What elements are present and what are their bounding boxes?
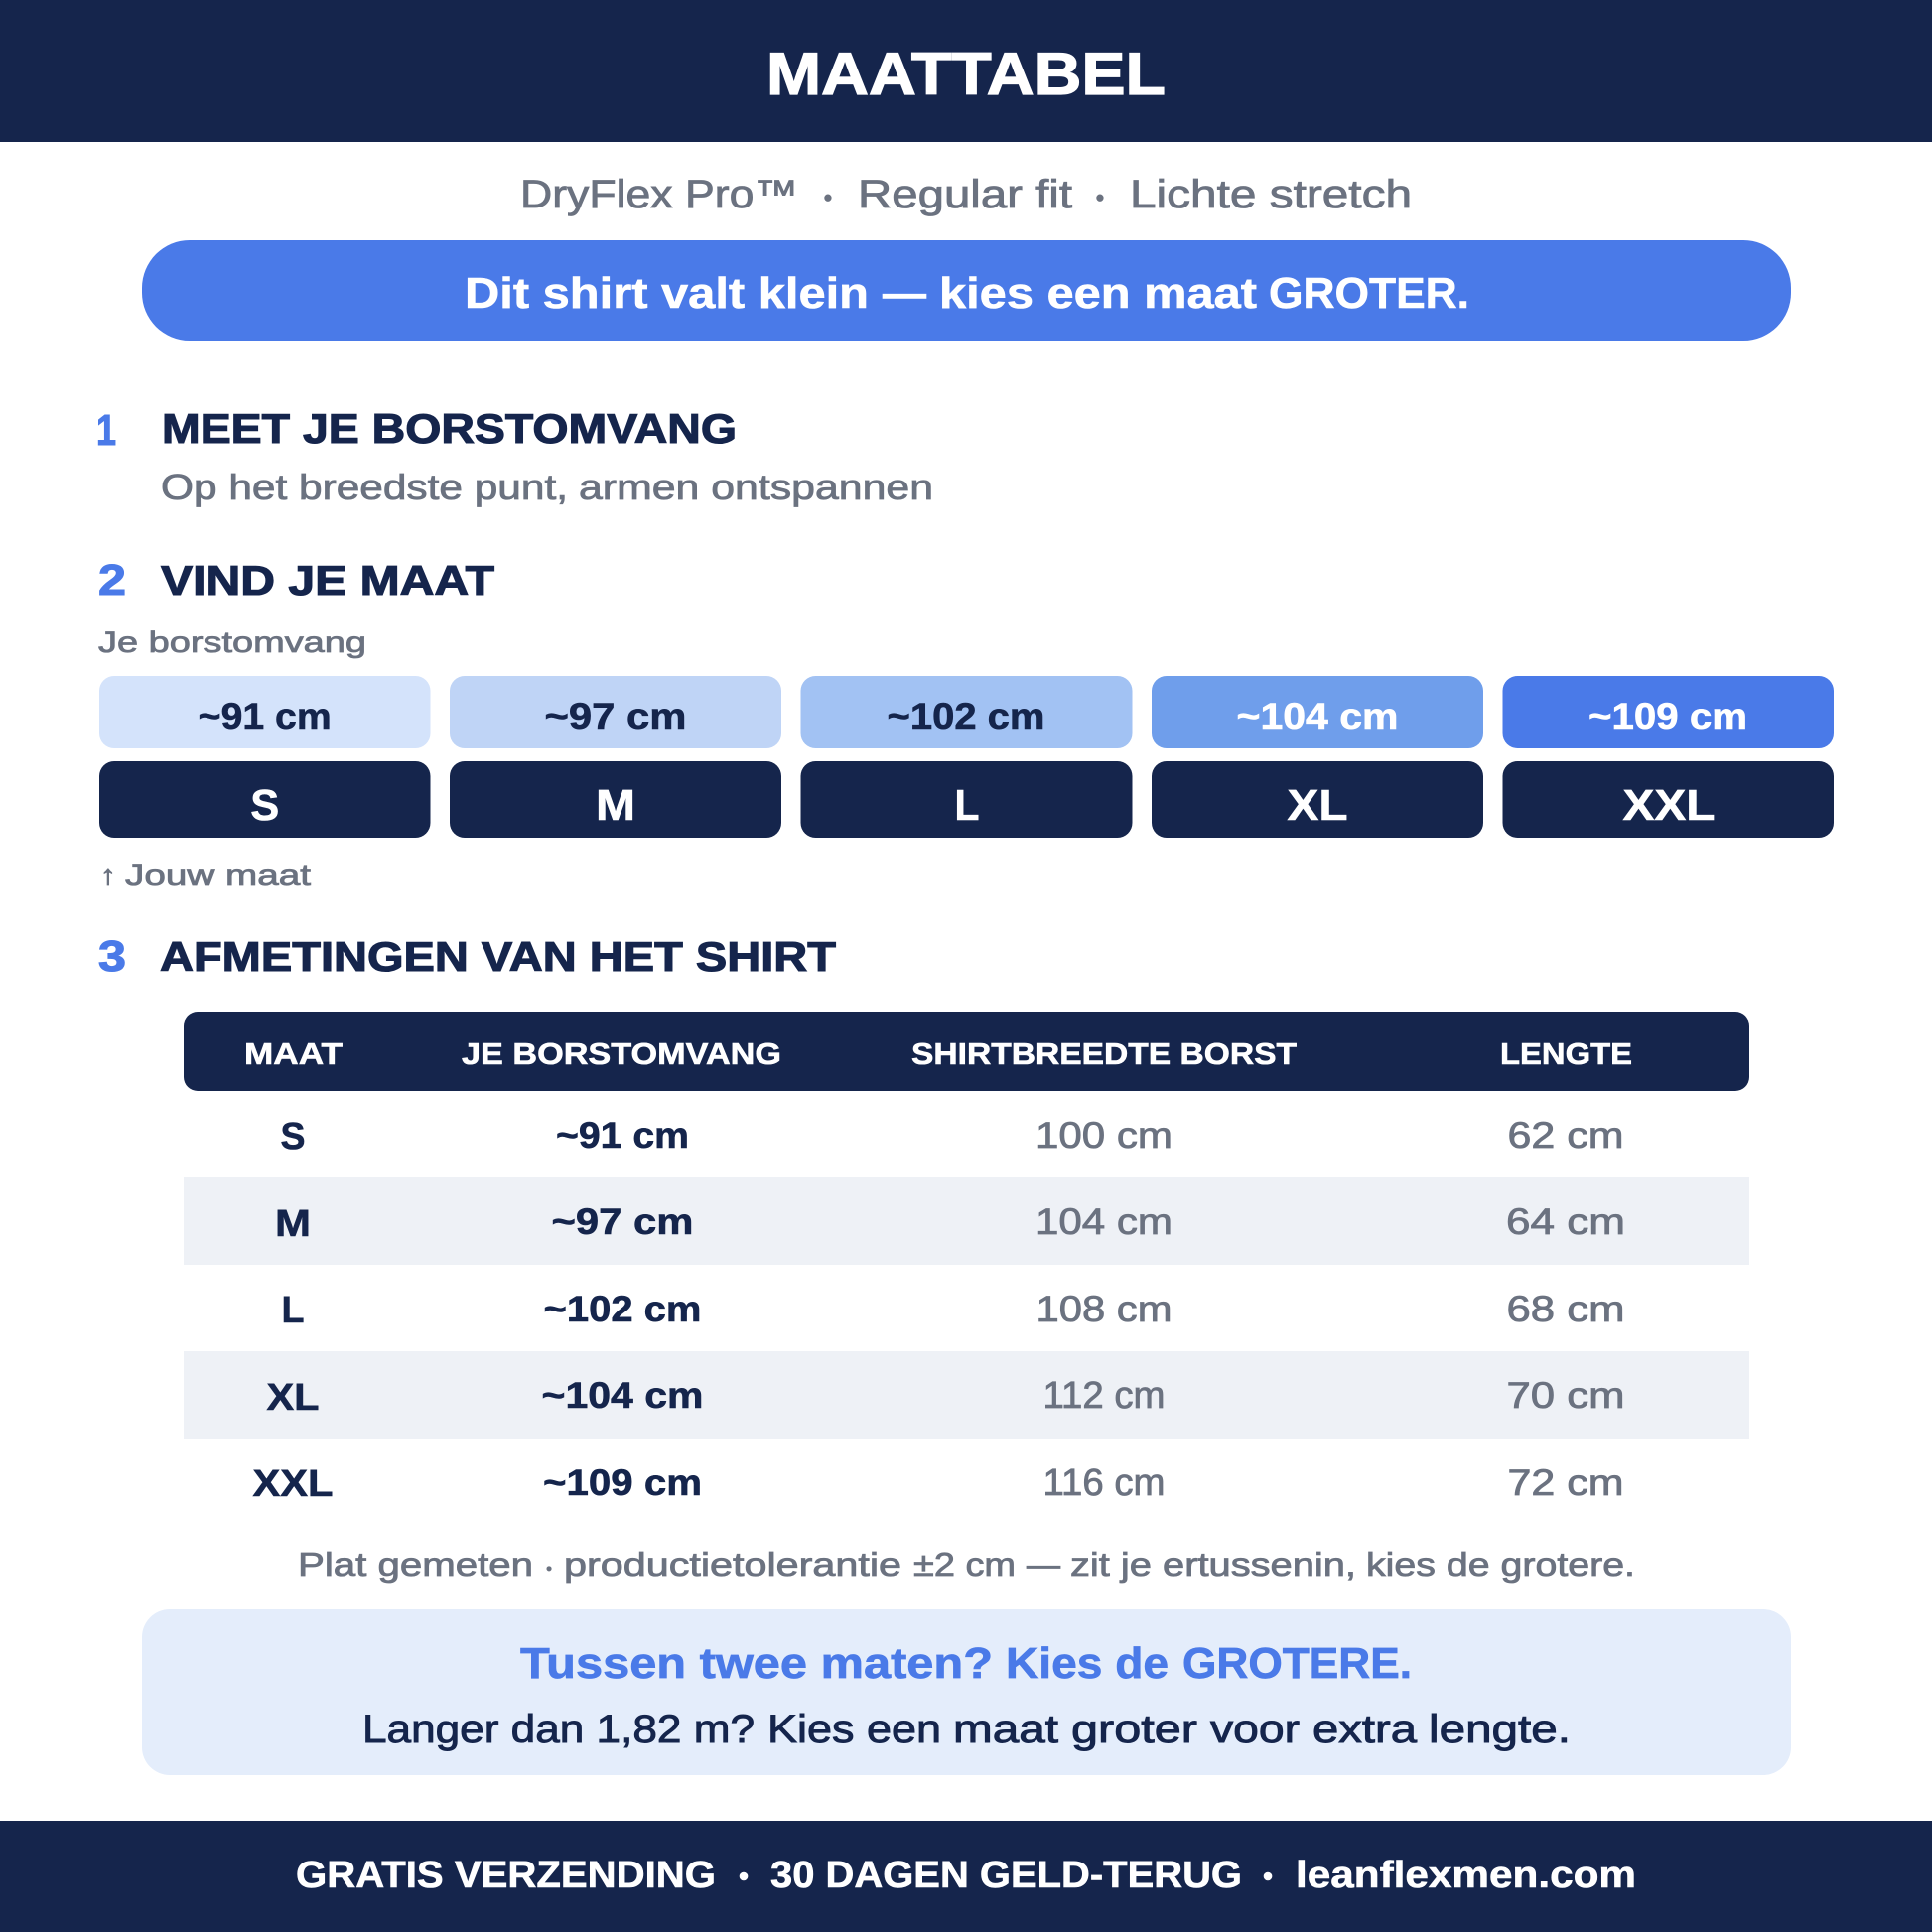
footer band: leanflexmen.com xyxy=(1296,1855,1636,1896)
callout panel xyxy=(142,1609,1791,1775)
callout body: groter xyxy=(1071,1708,1197,1751)
row L: 108 cm xyxy=(1036,1289,1172,1329)
your size note xyxy=(100,859,312,892)
callout headline: Tussen twee maten? xyxy=(520,1639,993,1688)
section 3 heading: AFMETINGEN VAN HET SHIRT xyxy=(160,933,836,980)
row XXL: ~109 cm xyxy=(543,1462,702,1503)
warning pill: Dit shirt valt klein xyxy=(465,269,869,318)
chip M: ~97 cm xyxy=(544,696,687,737)
footer band: GRATIS VERZENDING xyxy=(296,1855,716,1896)
row XL: ~104 cm xyxy=(542,1375,703,1416)
chip L xyxy=(800,676,1132,838)
row L xyxy=(282,1289,1624,1331)
callout body: Langer dan 1,82 m? xyxy=(362,1708,755,1751)
table footnote: — xyxy=(1027,1546,1060,1583)
row XL: XL xyxy=(266,1377,320,1419)
row L: ~102 cm xyxy=(544,1289,701,1329)
table header xyxy=(184,1012,1749,1091)
row S: ~91 cm xyxy=(556,1115,689,1156)
your size note: Jouw maat xyxy=(125,859,312,892)
warning pill: GROTER. xyxy=(1269,269,1469,318)
section 1: measure chest: 1 xyxy=(96,406,116,455)
section 1: measure chest: MEET JE BORSTOMVANG xyxy=(162,405,737,452)
row XXL: XXL xyxy=(252,1463,334,1505)
subtitle: • xyxy=(824,185,832,211)
chip L: L xyxy=(955,781,979,830)
row M xyxy=(184,1177,1749,1265)
row XXL xyxy=(252,1462,1624,1505)
chip XXL xyxy=(1503,676,1834,838)
callout headline: GROTERE. xyxy=(1182,1639,1412,1688)
chip XXL: XXL xyxy=(1622,781,1716,830)
row XL: 70 cm xyxy=(1507,1375,1624,1416)
table header: SHIRTBREEDTE BORST xyxy=(911,1036,1297,1071)
table header: MAAT xyxy=(244,1036,343,1071)
chip S xyxy=(99,676,431,838)
callout body: extra xyxy=(1312,1708,1418,1751)
label: chest: Je borstomvang xyxy=(98,626,366,659)
section 1: measure chest xyxy=(96,405,933,507)
row M: 104 cm xyxy=(1035,1201,1173,1242)
table footnote: zit je ertussenin, xyxy=(1070,1546,1356,1583)
footer band: • xyxy=(739,1861,749,1891)
size finder chips xyxy=(99,676,1834,838)
chip XL xyxy=(1152,676,1483,838)
table footnote: productietolerantie xyxy=(564,1546,901,1583)
footer band: • xyxy=(1263,1861,1273,1891)
row L: 68 cm xyxy=(1507,1289,1624,1329)
size table xyxy=(184,1012,1749,1505)
row S: S xyxy=(280,1116,306,1158)
row XXL: 116 cm xyxy=(1042,1462,1166,1504)
table footnote xyxy=(298,1546,1635,1583)
row L: L xyxy=(282,1290,304,1331)
chip S: S xyxy=(250,781,279,830)
section 2 heading: VIND JE MAAT xyxy=(161,557,494,604)
row S xyxy=(280,1115,1624,1158)
row XL xyxy=(184,1351,1749,1439)
table footnote: ±2 cm xyxy=(913,1546,1016,1583)
footer band: 30 DAGEN GELD-TERUG xyxy=(770,1855,1242,1896)
section 3 heading: 3 xyxy=(98,932,126,981)
warning pill xyxy=(142,240,1791,341)
callout body: Kies een xyxy=(767,1708,941,1751)
row XL: 112 cm xyxy=(1042,1375,1166,1417)
callout body xyxy=(362,1708,1571,1751)
row XXL: 72 cm xyxy=(1507,1462,1624,1503)
section 1: measure chest: Op het breedste punt, xyxy=(161,467,568,507)
header band with title xyxy=(0,0,1932,142)
section 1: measure chest: armen ontspannen xyxy=(579,467,933,507)
callout headline: Kies de xyxy=(1006,1639,1169,1688)
callout body: lengte. xyxy=(1429,1708,1571,1751)
callout body: maat xyxy=(953,1708,1058,1751)
section 2 heading: 2 xyxy=(98,556,126,605)
row M: 64 cm xyxy=(1506,1201,1625,1242)
table footnote: Plat gemeten xyxy=(298,1546,533,1583)
chip S: ~91 cm xyxy=(199,696,332,737)
table footnote: • xyxy=(546,1561,552,1578)
callout body: voor xyxy=(1210,1708,1300,1751)
subtitle: • xyxy=(1096,185,1104,211)
chip XXL: ~109 cm xyxy=(1588,696,1747,737)
subtitle: DryFlex Pro™ xyxy=(520,173,798,216)
chip M: M xyxy=(596,781,635,830)
header band with title: MAATTABEL xyxy=(766,41,1166,107)
table header: JE BORSTOMVANG xyxy=(462,1036,781,1071)
row M: ~97 cm xyxy=(552,1201,693,1242)
warning pill: kies een maat xyxy=(939,269,1257,318)
your size note: ↑ xyxy=(100,860,116,890)
chip L: ~102 cm xyxy=(888,696,1044,737)
warning pill: — xyxy=(883,269,926,318)
subtitle xyxy=(520,173,1412,216)
callout headline xyxy=(520,1639,1412,1688)
row S: 62 cm xyxy=(1507,1115,1624,1156)
chip XL: XL xyxy=(1287,781,1348,830)
subtitle: Regular fit xyxy=(858,173,1072,216)
table header: LENGTE xyxy=(1500,1036,1632,1071)
row S: 100 cm xyxy=(1035,1115,1173,1156)
footer band xyxy=(0,1821,1932,1932)
chip XL: ~104 cm xyxy=(1237,696,1398,737)
chip M xyxy=(450,676,781,838)
table footnote: kies de grotere. xyxy=(1366,1546,1635,1583)
subtitle: Lichte stretch xyxy=(1130,173,1412,216)
row M: M xyxy=(275,1203,311,1245)
